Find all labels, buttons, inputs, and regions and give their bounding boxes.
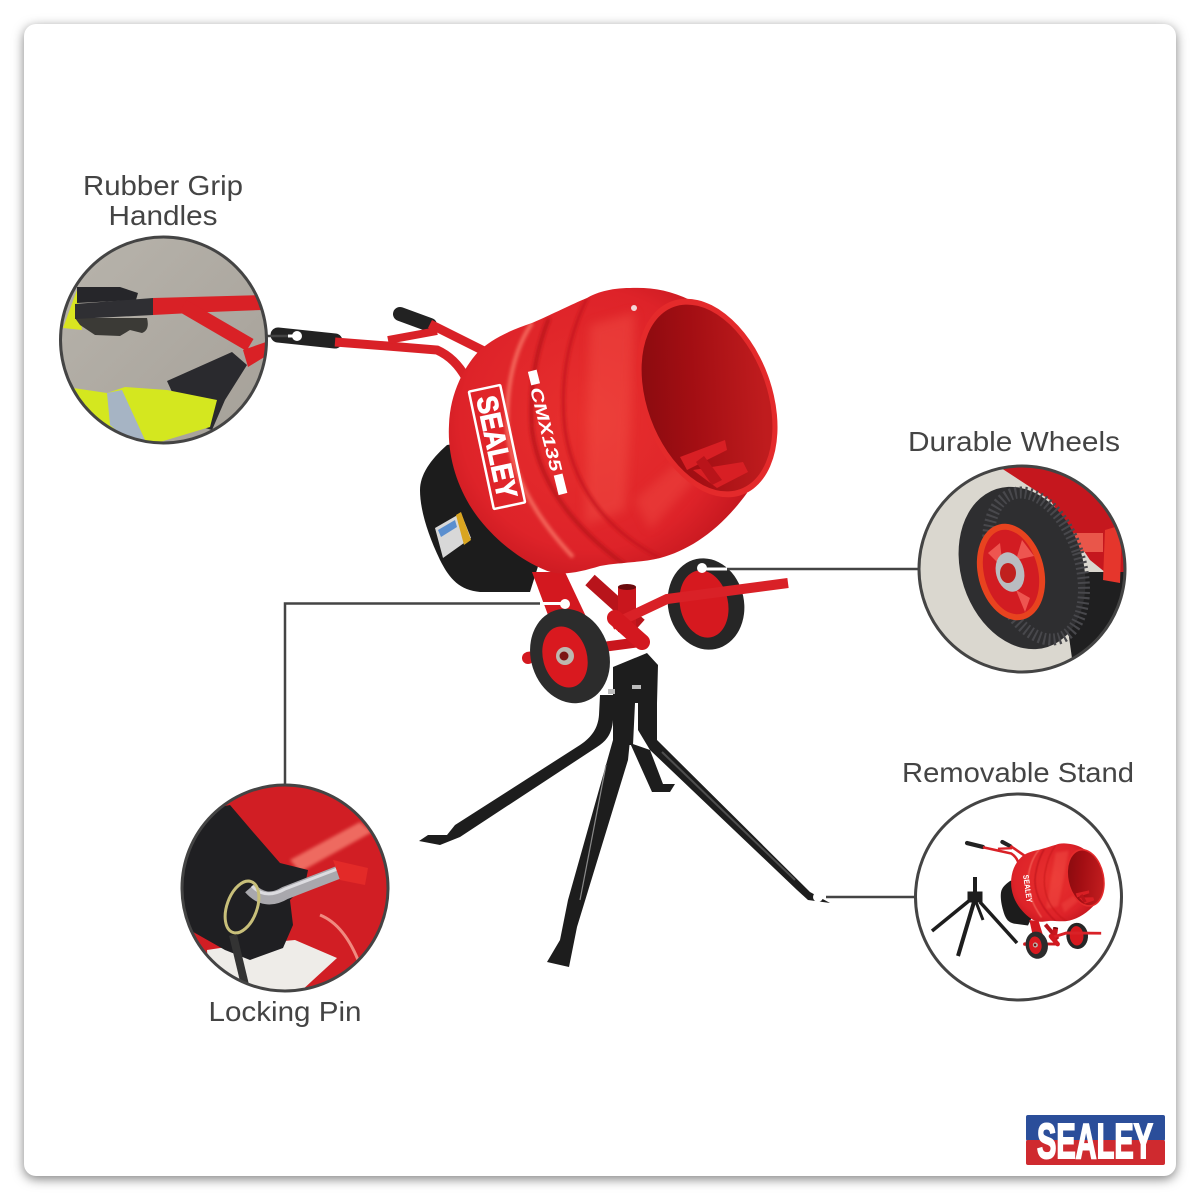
leader: locking pin <box>285 599 570 784</box>
circle photo: locking pin <box>181 784 389 992</box>
heading: rubber grip handles: Handles <box>108 200 218 231</box>
mini stand <box>932 877 1017 956</box>
model number on drum: CMX135 <box>526 385 566 474</box>
leader: durable wheels <box>697 563 918 573</box>
mini mixer <box>952 827 1118 971</box>
leader: removable stand <box>813 892 915 902</box>
screw <box>631 305 637 311</box>
heading: rubber grip handles: Rubber Grip <box>83 170 243 201</box>
logo on drum: SEALEY <box>470 393 522 501</box>
heading: durable wheels: Durable Wheels <box>908 426 1120 457</box>
mini mixer: SEALEY <box>1021 874 1034 904</box>
photo: main stand <box>419 653 830 967</box>
circle photo: durable wheels <box>919 466 1127 680</box>
photo: main cement mixer <box>278 279 803 714</box>
heading: removable stand: Removable Stand <box>902 757 1134 788</box>
circle photo: removable stand <box>916 794 1122 1000</box>
leader: rubber grip <box>267 331 302 341</box>
circle photo: rubber grip handles <box>60 237 268 445</box>
warning stickers <box>435 512 471 558</box>
heading: locking pin: Locking Pin <box>208 996 362 1027</box>
model number on drum <box>522 369 571 497</box>
